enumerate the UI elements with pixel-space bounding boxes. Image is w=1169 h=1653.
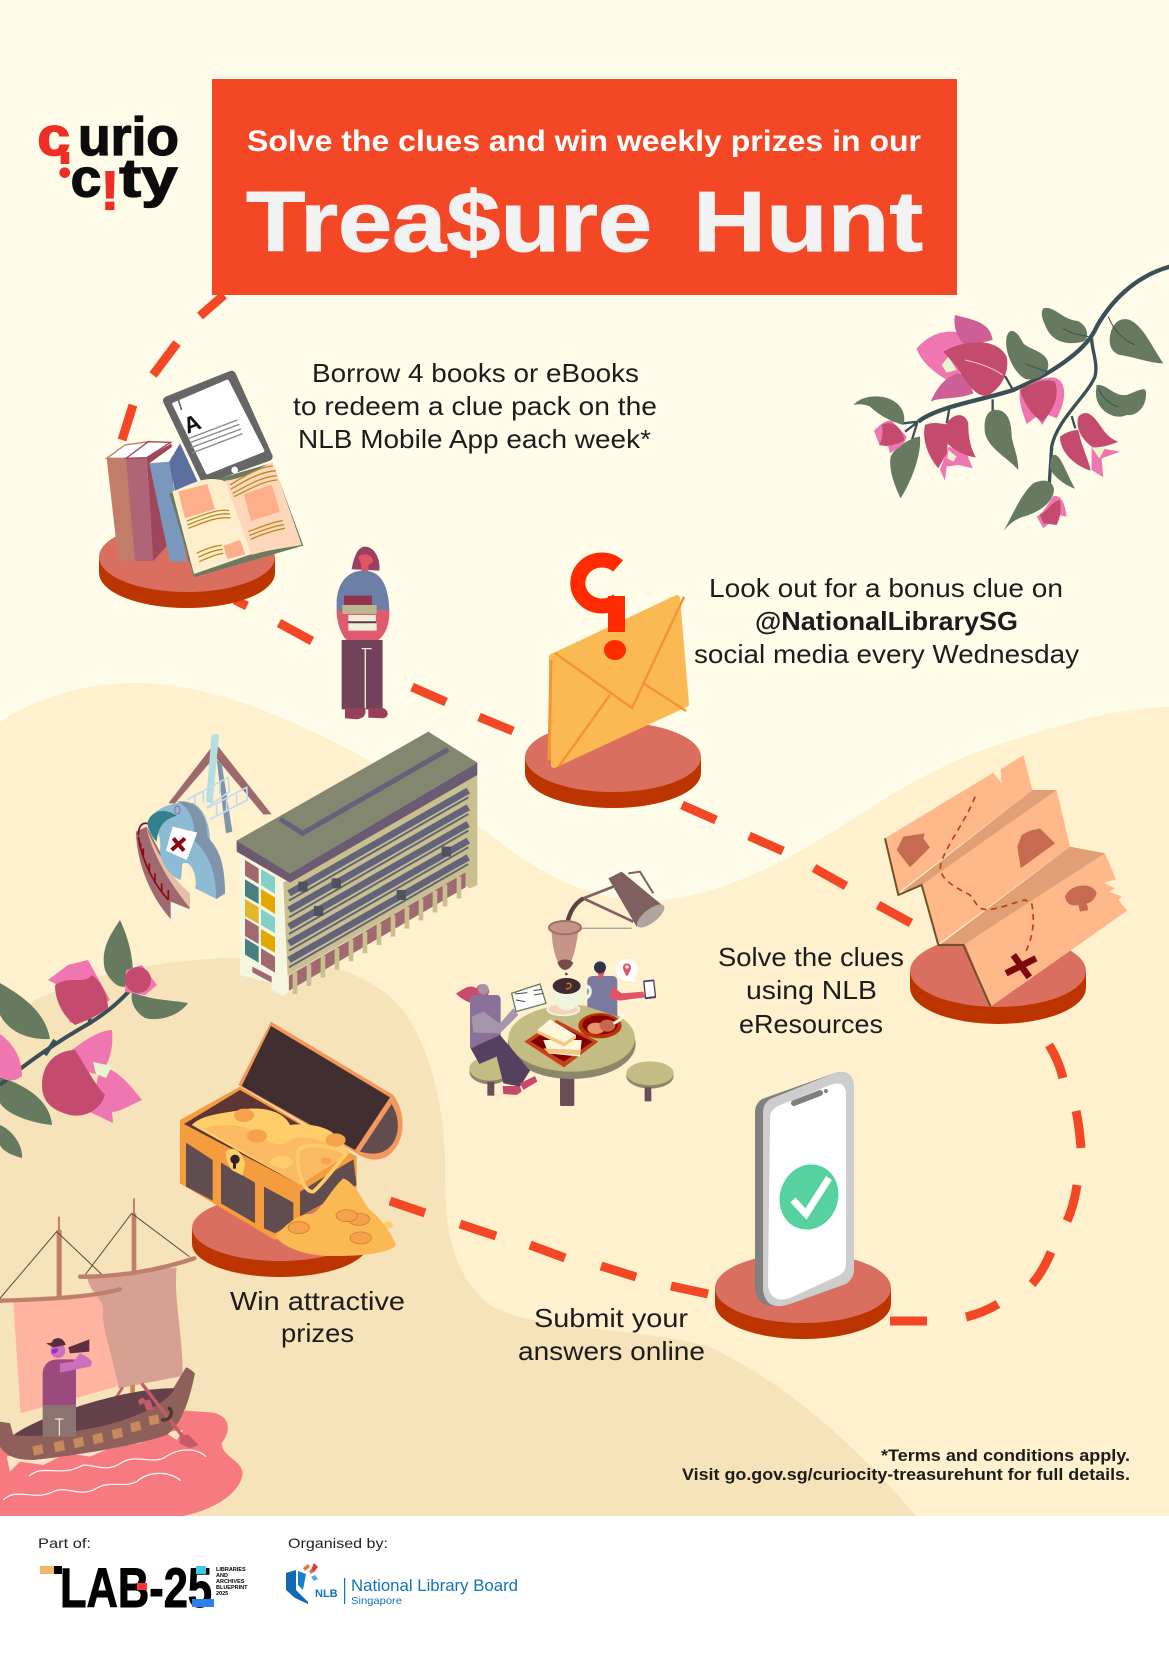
text: step 2 bonus clue: @NationalLibrarySG [755,606,1018,636]
illustration: girl carrying books [337,547,389,719]
text: step 3 solve clues: using NLB [746,975,877,1005]
text: step 1 borrow books: to redeem a clue pack on the [293,391,657,421]
text: step 5 win prizes [230,1286,405,1348]
text: step 3 solve clues: Solve the clues [718,942,904,972]
banner subtitle: Solve the clues and win weekly prizes in our [247,125,921,158]
masts and sails [57,1230,62,1298]
logo: National Library Board: NLB [315,1588,338,1600]
balcony bands [289,791,468,960]
footer: organised by label: Organised by: [288,1535,388,1551]
logo: LAB-25: AND [216,1573,228,1579]
person with phone [587,976,617,1017]
title banner [212,79,957,295]
sea [0,1411,243,1516]
logo: curiocity: urio [78,108,179,167]
text: step 3 solve clues [718,942,904,1039]
illustration: books and tablet [107,375,303,577]
fine print: *Terms and conditions apply. [881,1446,1130,1465]
illustration: top-right bougainvillea branch [853,267,1169,532]
lookout figure [43,1359,76,1405]
person reading [456,984,489,1007]
text: step 2 bonus clue [694,573,1079,669]
logo: National Library Board: National Library Board [351,1576,518,1595]
logo: curiocity: ! [101,159,119,221]
fine print [682,1446,1130,1484]
logo: curiocity: ty [119,150,178,209]
illustration: ship on water [0,1198,243,1516]
platforms [99,522,1086,1339]
text: step 4 submit answers: Submit your [534,1303,688,1333]
logo: curiocity: c [71,150,101,209]
text: step 2 bonus clue: Look out for a bonus clue on [709,573,1063,603]
logo: LAB-25: LIBRARIES [216,1567,246,1573]
logo: LAB-25: ARCHIVES [216,1579,245,1585]
text: step 2 bonus clue: social media every Wednesday [694,639,1079,669]
banner main title: Hunt [693,175,923,270]
text: step 3 solve clues: eResources [739,1009,883,1039]
footer: part of label: Part of: [38,1535,91,1551]
illustration: merlion and bridge [136,734,272,919]
logo: National Library Board [286,1563,518,1607]
logo: LAB-25: 2025 [216,1591,228,1597]
banner main title: Trea$ure [246,175,652,270]
illustration: treasure chest [180,1022,403,1256]
hull [126,1385,140,1408]
illustration: phone with tick [755,1072,854,1306]
text: step 1 borrow books [293,358,657,454]
logo: curiocity [37,108,179,221]
logo: LAB-25: LAB-25 [60,1556,212,1619]
background hill: dark [0,958,916,1516]
logo: curiocity: c [37,108,70,167]
illustration: library building [237,732,477,997]
logo: LAB-25: BLUEPRINT [216,1585,248,1591]
illustration: envelope with clue mark [549,560,686,766]
text: step 4 submit answers: answers online [518,1336,705,1366]
coffee cup [547,1003,579,1015]
illustration: bottom-left bougainvillea branch [0,920,188,1158]
open book [169,463,303,577]
text: step 1 borrow books: NLB Mobile App each week* [298,424,651,454]
text: step 4 submit answers [518,1303,705,1366]
text: step 5 win prizes: prizes [281,1318,354,1348]
banner main title [246,175,923,270]
text: step 5 win prizes: Win attractive [230,1286,405,1316]
illustration: books and tablet: A [179,408,204,439]
illustration: kopitiam scene [456,872,674,1106]
background hill: light [0,683,1169,1516]
tablet [167,375,268,479]
illustration: folded treasure map [885,755,1127,1007]
logo: National Library Board: Singapore [351,1595,402,1607]
text: step 1 borrow books: Borrow 4 books or eBooks [312,358,639,388]
fine print: Visit go.gov.sg/curiocity-treasurehunt for full details. [682,1465,1130,1484]
dashed treasure route [122,295,1081,1321]
kaya toast and eggs [524,1020,598,1067]
footer band [0,1516,1169,1653]
